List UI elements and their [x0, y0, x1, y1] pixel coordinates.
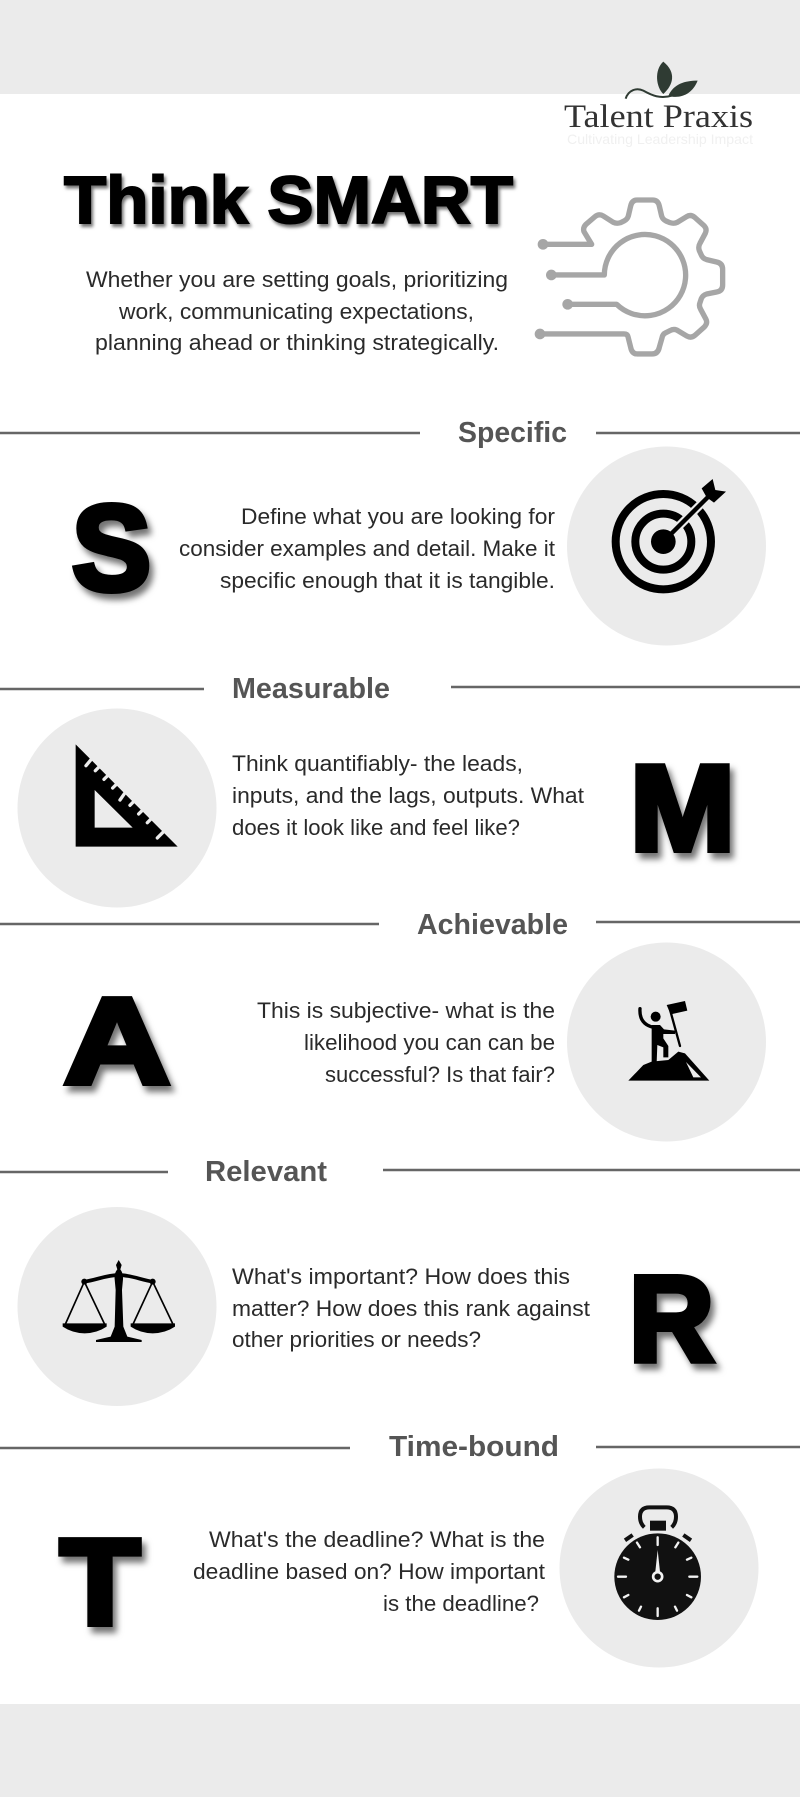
heading rule and label: Time-bound: Time-bound [389, 1431, 559, 1463]
text: Specific: consider examples and detail. Make it [179, 536, 555, 561]
letter T: T [60, 1514, 140, 1650]
text: Achievable [257, 998, 555, 1087]
text: Time-bound: deadline based on? How important [193, 1559, 545, 1584]
text: Relevant: matter? How does this rank against [232, 1296, 590, 1321]
intro text: work, communicating expectations, [118, 299, 474, 324]
section: Measurable [0, 673, 800, 908]
text: Time-bound: is the deadline? [383, 1591, 539, 1616]
logo tagline: Cultivating Leadership Impact [567, 131, 753, 147]
section: Specific [0, 417, 800, 646]
top band [0, 0, 800, 94]
logo wordmark: Talent Praxis [564, 99, 753, 135]
text: Measurable: inputs, and the lags, outputs. What [232, 783, 584, 808]
letter S: S [72, 480, 151, 616]
letter M: M [630, 740, 735, 876]
text: Time-bound [193, 1527, 545, 1616]
text: Measurable: Think quantifiably- the leads, [232, 751, 523, 776]
intro text [86, 267, 508, 355]
heading rule and label: Measurable: Measurable [232, 673, 390, 705]
heading rule and label: Relevant: Relevant [205, 1156, 327, 1188]
title: Think SMART [64, 163, 513, 238]
text: Achievable: likelihood you can can be [304, 1030, 555, 1055]
icon: climber with flag on mountain [567, 942, 766, 1142]
icon: balance scales [18, 1207, 216, 1406]
section: Achievable [0, 909, 800, 1142]
text: Time-bound: What's the deadline? What is the [209, 1527, 545, 1552]
text: Specific: specific enough that it is tangible. [220, 568, 555, 593]
icon: set square ruler [18, 708, 216, 908]
text: Specific: Define what you are looking for [241, 504, 555, 529]
text: Relevant: other priorities or needs? [232, 1327, 481, 1352]
intro text: Whether you are setting goals, prioritizing [86, 267, 508, 292]
icon: target with arrow [567, 446, 766, 646]
text: Measurable: does it look like and feel like? [232, 815, 520, 840]
icon: gear with circuit lines [535, 200, 723, 354]
intro text: planning ahead or thinking strategically. [95, 330, 499, 355]
logo: Talent Praxis [564, 62, 753, 147]
text: Relevant [232, 1264, 590, 1352]
heading rule and label: Achievable: Achievable [417, 909, 568, 941]
text: Measurable [232, 751, 584, 840]
text: Achievable: This is subjective- what is the [257, 998, 555, 1023]
letter R: R [629, 1251, 714, 1387]
icon: stopwatch [560, 1468, 758, 1668]
text: Specific [179, 504, 555, 593]
letter A: A [64, 973, 170, 1109]
heading rule and label: Specific: Specific [458, 417, 567, 449]
bottom band [0, 1704, 800, 1797]
text: Relevant: What's important? How does this [232, 1264, 570, 1289]
text: Achievable: successful? Is that fair? [325, 1062, 555, 1087]
section: Relevant [0, 1156, 800, 1406]
section: Time-bound [0, 1431, 800, 1668]
icon: logo leaves [626, 62, 698, 99]
